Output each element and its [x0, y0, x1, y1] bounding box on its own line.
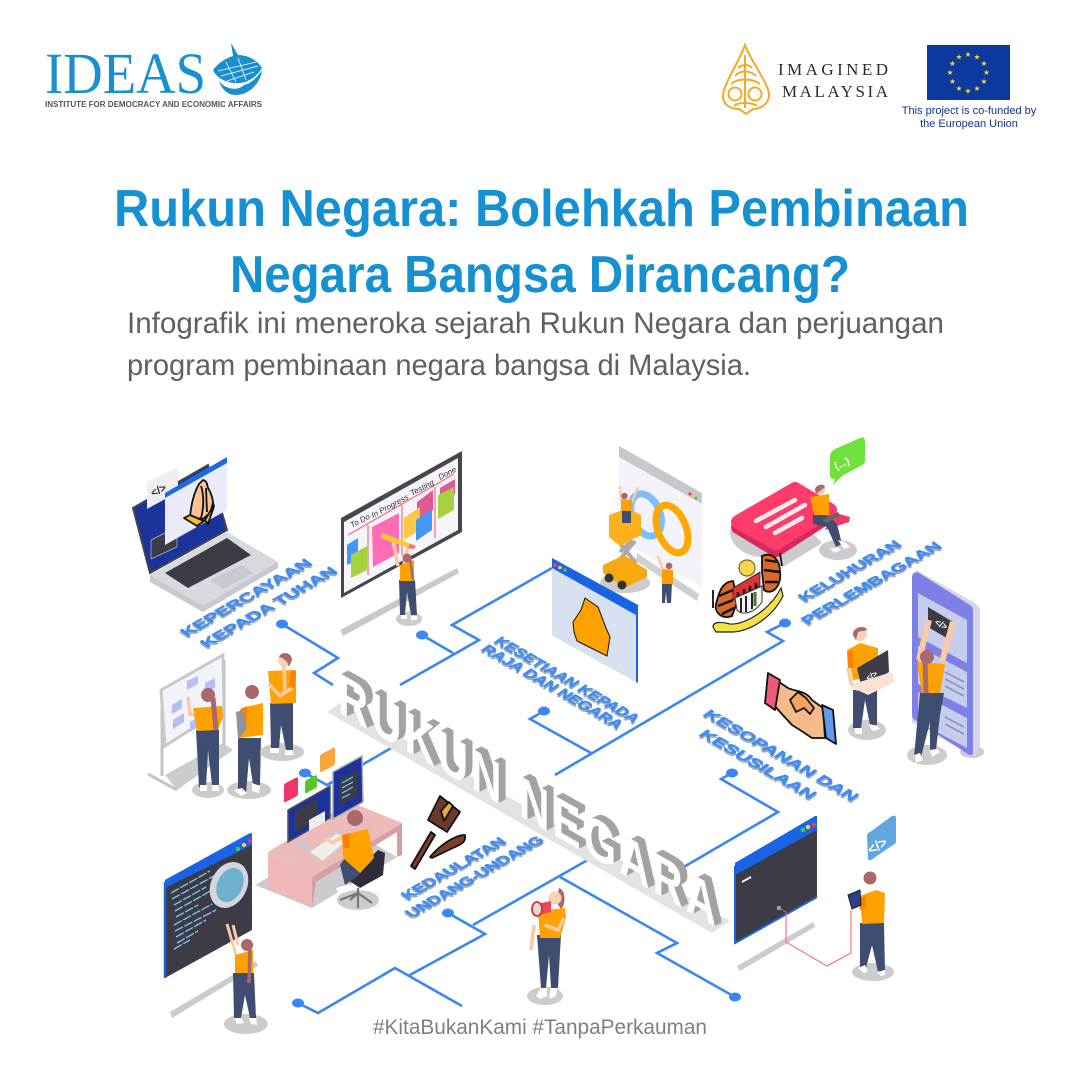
kanban board and person — [340, 451, 462, 636]
icon: magnifier — [202, 856, 256, 930]
dark window with tablet man — [735, 816, 896, 981]
man with box: </> — [864, 669, 879, 683]
logo: Imagined Malaysia: IMAGINED — [778, 60, 888, 79]
icon: praying hands — [184, 480, 214, 526]
dark code card: </> — [933, 617, 949, 632]
3D title: Rukun Negara: RUKUN NEGARA — [340, 660, 718, 939]
icon: royal headdress — [573, 598, 610, 656]
label: Kesopanan dan Kesusilaan: KESOPANAN DAN — [699, 710, 861, 806]
monitors — [288, 756, 363, 851]
laptop: </> — [149, 482, 169, 500]
kanban board and person: Done — [437, 465, 458, 482]
hashtags: #KitaBukanKami #TanpaPerkauman — [373, 1016, 707, 1039]
label: Kepercayaan kepada Tuhan: KEPERCAYAAN — [177, 557, 317, 639]
kanban board and person: In Progress — [370, 493, 410, 520]
icon: handshake — [765, 673, 836, 744]
label: Kedaulatan undang-undang: KEDAULATAN — [398, 835, 511, 902]
label: Keluhuran Perlembagaan: PERLEMBAGAAN — [798, 540, 946, 627]
logo: Imagined Malaysia — [723, 45, 889, 114]
phone with woman and man — [847, 570, 984, 765]
man with box — [847, 627, 895, 740]
sitting woman — [810, 485, 857, 560]
logo: European Union flag and note: ★ — [981, 77, 988, 86]
logo: European Union flag and note: ★ — [956, 84, 963, 93]
logo: European Union flag and note: ★ — [947, 68, 954, 77]
label: Kesetiaan kepada Raja dan Negara: KESETIAAN KEPADA — [490, 635, 643, 725]
3D title: Rukun Negara: RUKUN NEGARA — [344, 658, 722, 937]
3D title: Rukun Negara: RUKUN NEGARA — [343, 658, 721, 938]
thinking man — [260, 653, 304, 761]
3D title: Rukun Negara: RUKUN NEGARA — [342, 659, 720, 938]
label: Keluhuran Perlembagaan: KELUHURAN — [795, 538, 906, 604]
woman at whiteboard — [188, 688, 224, 798]
label: Kepercayaan kepada Tuhan — [177, 557, 342, 652]
logo: European Union flag and note: ★ — [974, 52, 981, 62]
label: Kepercayaan kepada Tuhan: KEPADA TUHAN — [197, 567, 342, 652]
subtitle: Infografik ini meneroka sejarah Rukun Negara dan perjuangan — [127, 307, 944, 340]
lift and infinity window — [600, 446, 702, 603]
label: Kedaulatan undang-undang: KEDAULATAN — [398, 837, 511, 904]
logo: European Union flag and note — [902, 45, 1037, 130]
seated programmer — [326, 810, 385, 910]
kanban board and person: To Do — [349, 512, 372, 530]
person on lift — [620, 486, 638, 523]
icon: Malaysia coat of arms — [713, 553, 783, 632]
icon: gold wayang — [723, 45, 769, 114]
logo: Imagined Malaysia: MALAYSIA — [782, 82, 889, 101]
logo: IDEAS: IDEAS — [45, 41, 206, 106]
3D title: Rukun Negara: RUKUN NEGARA — [338, 661, 716, 940]
code tags — [284, 747, 335, 803]
logo: European Union flag and note: This project is co-funded by — [902, 105, 1037, 117]
logo: IDEAS: INSTITUTE FOR DEMOCRACY AND ECONOMIC AFFAIRS — [45, 100, 263, 109]
icon: green chat bubble: {...} — [832, 456, 852, 473]
3D title: Rukun Negara: RUKUN NEGARA — [339, 660, 717, 940]
title: Negara Bangsa Dirancang? — [230, 246, 850, 304]
kanban board and person: Testing — [409, 478, 436, 498]
label: Kesopanan dan Kesusilaan: KESUSILAAN — [695, 728, 819, 802]
label: Kedaulatan undang-undang: UNDANG-UNDANG — [402, 836, 549, 922]
label: Keluhuran Perlembagaan: PERLEMBAGAAN — [798, 542, 946, 629]
title: Rukun Negara: Bolehkah Pembinaan — [114, 180, 969, 238]
desk with programmer — [255, 747, 402, 910]
woman with megaphone — [527, 888, 566, 1005]
3D title: Rukun Negara: RUKUN NEGARA — [345, 657, 723, 937]
speech bubble and sitting woman — [730, 437, 865, 567]
subtitle — [127, 307, 944, 382]
label: Kepercayaan kepada Tuhan: KEPADA TUHAN — [197, 565, 342, 650]
logo: European Union flag and note: ★ — [949, 59, 956, 68]
icon: IDEAS bird — [213, 43, 262, 95]
label: Kedaulatan undang-undang: UNDANG-UNDANG — [402, 834, 549, 920]
man with tablet — [227, 685, 271, 799]
code window with magnifier — [165, 833, 268, 1034]
window: headdress — [552, 558, 638, 683]
logo: European Union flag and note: ★ — [949, 77, 956, 86]
subtitle: program pembinaan negara bangsa di Malaysia. — [127, 349, 751, 382]
person at board — [381, 533, 422, 626]
man with tablet — [848, 872, 894, 981]
logo: European Union flag and note: ★ — [981, 59, 988, 68]
woman with magnifier — [224, 924, 268, 1034]
icon: megaphone — [532, 901, 551, 916]
label: Kesetiaan kepada Raja dan Negara: KESETIAAN KEPADA — [490, 637, 643, 727]
logo: European Union flag and note: ★ — [983, 68, 990, 77]
label: Kesetiaan kepada Raja dan Negara: RAJA DAN NEGARA — [477, 645, 627, 733]
laptop — [133, 457, 278, 612]
label: Kesopanan dan Kesusilaan: KESOPANAN DAN — [699, 708, 861, 804]
3D title: Rukun Negara: RUKUN NEGARA — [341, 659, 719, 939]
label: Kesopanan dan Kesusilaan: KESUSILAAN — [695, 730, 819, 804]
logo: European Union flag and note: ★ — [956, 52, 963, 62]
logo: European Union flag and note: ★ — [965, 86, 972, 96]
icon: code tile — [864, 816, 896, 860]
icon: code tile: </> — [864, 834, 890, 858]
label: Keluhuran Perlembagaan: KELUHURAN — [795, 540, 906, 606]
dark code card — [928, 607, 953, 640]
logo: European Union flag and note: ★ — [965, 50, 972, 59]
person beside window — [658, 556, 673, 603]
label: Keluhuran Perlembagaan — [795, 538, 946, 629]
label: Kepercayaan kepada Tuhan: KEPERCAYAAN — [177, 559, 317, 641]
icon: judge gavel — [411, 796, 465, 869]
logo: European Union flag and note: ★ — [974, 84, 981, 93]
label: Kesetiaan kepada Raja dan Negara: RAJA DAN NEGARA — [477, 643, 627, 731]
title — [114, 180, 969, 304]
whiteboard group of three people — [148, 653, 304, 799]
logo: European Union flag and note: the European Union — [920, 118, 1018, 130]
woman at phone — [907, 620, 953, 765]
circuit lines — [276, 568, 791, 1013]
label: Kesopanan dan Kesusilaan — [695, 708, 861, 806]
